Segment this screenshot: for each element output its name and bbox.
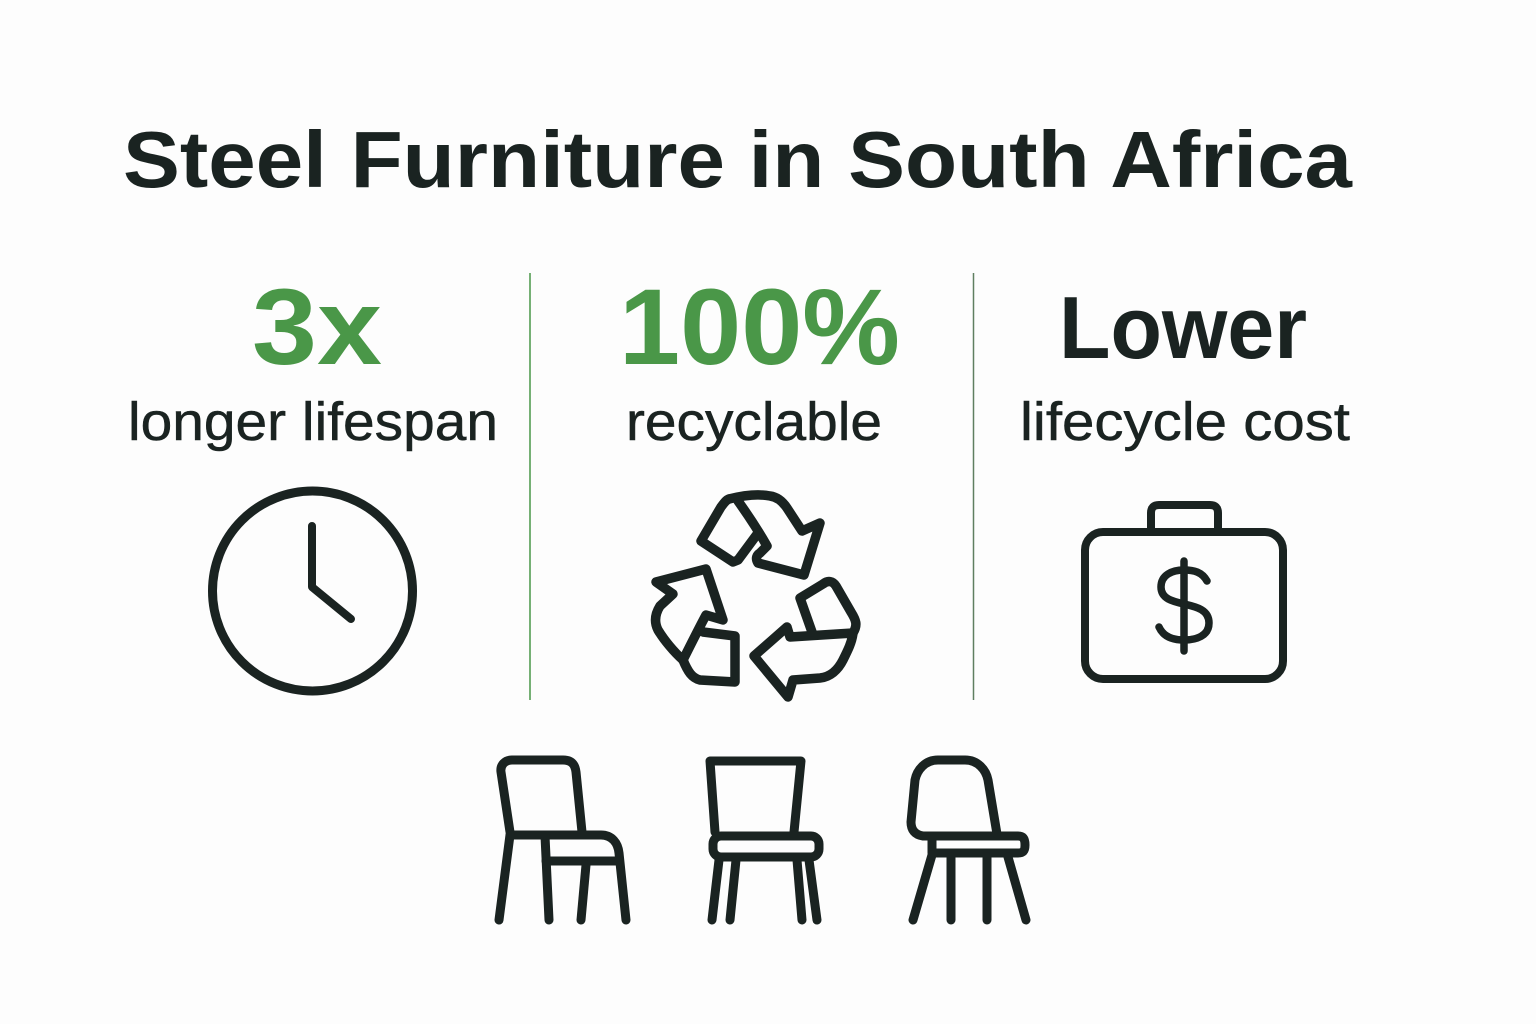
stat: 3x: 3x — [252, 266, 382, 387]
icon: chair front view — [710, 761, 819, 920]
stat: 100%: 100% — [619, 266, 900, 387]
label: longer lifespan: longer lifespan — [128, 392, 498, 452]
stat: Lower: Lower — [1059, 278, 1307, 377]
label: recyclable: recyclable — [626, 392, 882, 452]
icon: chair rounded back — [911, 760, 1026, 920]
icon: recycling arrows — [656, 495, 856, 697]
panel: lower lifecycle cost — [1020, 278, 1350, 679]
icon: chair side view — [499, 760, 626, 920]
icon: clock — [212, 491, 412, 691]
row: chairs — [499, 760, 1026, 920]
label: lifecycle cost: lifecycle cost — [1020, 392, 1350, 452]
panel: recyclable — [619, 266, 900, 697]
icon: briefcase with dollar — [1085, 505, 1283, 679]
title: Steel Furniture in South Africa — [123, 115, 1353, 204]
panel: longer lifespan — [128, 266, 498, 691]
